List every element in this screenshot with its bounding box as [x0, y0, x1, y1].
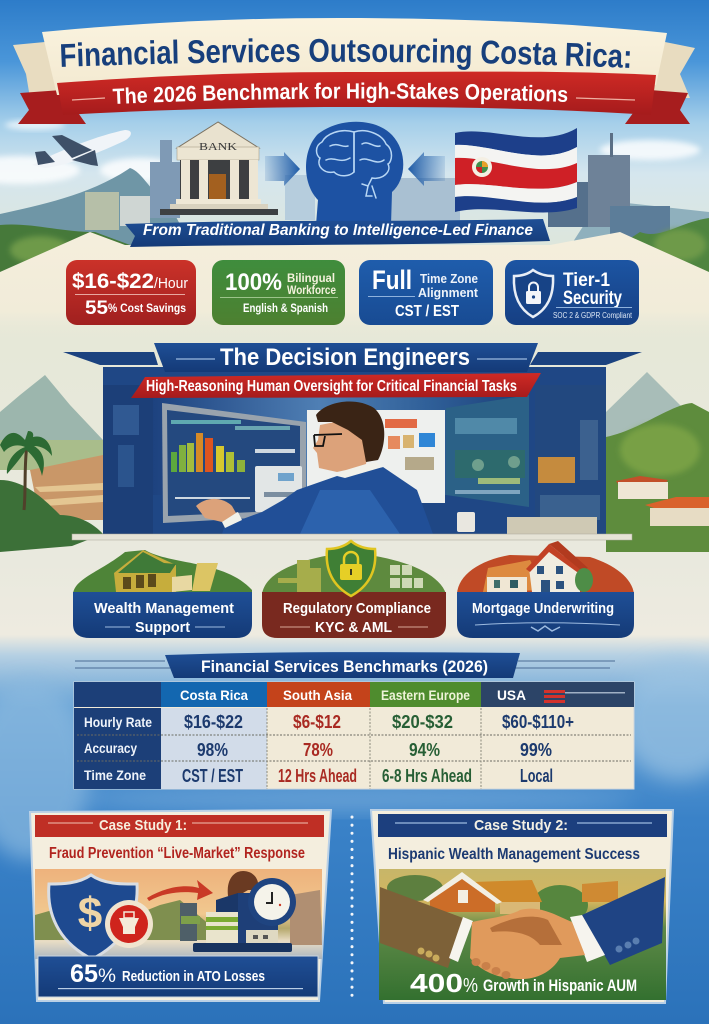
row: time zone: 6-8 Hrs Ahead	[382, 766, 472, 786]
card: wealth management support	[73, 550, 252, 638]
heading: the decision engineers	[63, 343, 642, 372]
card: mortgage underwriting: Mortgage Underwriting	[472, 600, 614, 617]
icon: Costa Rica flag	[455, 128, 577, 212]
icon: gold house and documents	[114, 550, 218, 592]
icon: shield with padlock	[514, 270, 553, 317]
arrow: bank to brain	[265, 152, 300, 186]
row label column: Time Zone	[84, 767, 146, 783]
banner: from traditional banking: From Traditional Banking to Intelligence-Led Finance	[143, 222, 533, 239]
card: cost: 55	[85, 298, 108, 319]
card: time zone alignment: Alignment	[418, 285, 479, 300]
result caption: 400% growth: Growth in Hispanic AUM	[483, 976, 637, 995]
card: regulatory compliance: Regulatory Compliance	[283, 600, 431, 617]
panel: case study 1: Fraud Prevention “Live-Market” Response	[49, 845, 305, 862]
card: tier-1 security: SOC 2 & GDPR Compliant	[553, 311, 633, 320]
right monitor with dashboard	[446, 395, 529, 507]
panel: case study 2: Case Study 2:	[474, 817, 568, 834]
result banner: 65% reduction: Reduction in ATO Losses	[122, 968, 265, 985]
icon: dollar shield	[49, 875, 153, 959]
arrow: flag to brain	[408, 152, 445, 186]
card: time zone alignment: Time Zone	[420, 271, 478, 286]
result banner: 65% reduction: %	[98, 966, 116, 987]
result caption: 400% growth: 400	[410, 968, 463, 998]
icon: USA flag	[544, 690, 625, 703]
panel: decision engineers scene	[103, 367, 606, 534]
panel: case study 1: Case Study 1:	[99, 817, 187, 834]
result banner: 65% reduction	[38, 956, 318, 997]
right sleeve	[582, 877, 665, 965]
row: accuracy	[197, 740, 552, 760]
heading: the decision engineers: The Decision Engineers	[220, 344, 470, 371]
card: cost: $16-$22	[72, 270, 154, 293]
header row: South Asia	[283, 687, 352, 703]
card: cost: % Cost Savings	[108, 301, 186, 315]
card: bilingual workforce: 100%	[225, 269, 282, 296]
card: cost: /Hour	[154, 275, 188, 292]
result caption: 400% growth: %	[463, 975, 478, 997]
heading: financial services benchmarks: Financial Services Benchmarks (2026)	[201, 657, 488, 676]
row: time zone	[182, 766, 553, 786]
panel: case study 2: Hispanic Wealth Management Success	[388, 846, 640, 863]
mug	[457, 512, 475, 532]
icon: dollar shield: $	[78, 889, 102, 938]
card: bilingual workforce	[212, 260, 345, 325]
header row: Costa Rica	[180, 687, 248, 703]
upper landscape with mountains, skyline and trees	[0, 133, 709, 300]
header row	[74, 682, 634, 707]
figure: analyst in blue suit	[196, 402, 433, 534]
row: hourly rate: $60-$110+	[502, 712, 574, 732]
heading: financial services benchmarks	[75, 652, 615, 678]
title banner: Financial Services Outsourcing Costa Rica:	[61, 38, 630, 70]
card: time zone alignment	[359, 260, 493, 325]
icon: bank building	[160, 122, 278, 215]
stage shelf	[72, 534, 632, 540]
card: time zone alignment: CST / EST	[395, 303, 459, 320]
panel: case study 1	[30, 810, 331, 1001]
card: bilingual workforce: English & Spanish	[243, 301, 328, 315]
title banner	[13, 18, 695, 124]
left sleeve	[380, 887, 463, 968]
table: benchmark comparison	[74, 682, 634, 789]
illustration: fraud prevention	[35, 869, 322, 959]
banner: from traditional banking	[125, 219, 550, 247]
row label column: Accuracy	[84, 740, 137, 756]
icon: brain in head	[306, 122, 403, 225]
result caption: 400% growth	[410, 968, 637, 998]
card: mortgage underwriting	[457, 541, 634, 638]
row: hourly rate: $6-$12	[293, 712, 341, 732]
row: hourly rate: $16-$22	[184, 712, 243, 732]
panel: cream key-metrics backdrop	[0, 232, 709, 345]
card: wealth management support: Support	[135, 619, 190, 636]
left monitor with bar chart	[162, 403, 306, 523]
row: time zone: Local	[520, 766, 553, 786]
result banner: 65% reduction: 65	[70, 960, 98, 988]
row: time zone: 12 Hrs Ahead	[278, 766, 357, 786]
row: accuracy: 94%	[409, 740, 440, 760]
header row: USA	[497, 687, 526, 703]
illustration: handshake with house	[379, 869, 666, 1000]
card: regulatory compliance	[262, 541, 446, 638]
row: time zone: CST / EST	[182, 766, 243, 786]
left landscape with mountain, palm and terraces	[0, 375, 103, 552]
row: accuracy: 78%	[303, 740, 333, 760]
row: accuracy: 98%	[197, 740, 228, 760]
icon: houses	[483, 541, 593, 592]
card: tier-1 security: Tier-1	[563, 270, 610, 291]
clasped hands	[470, 909, 585, 979]
card: regulatory compliance: KYC & AML	[315, 619, 392, 636]
icon: person and clock	[193, 871, 296, 952]
card: cost	[66, 260, 196, 325]
divider: dotted line	[350, 817, 354, 998]
icon: bank building: BANK	[199, 141, 237, 153]
ribbon: high-reasoning human oversight	[131, 373, 541, 398]
card: bilingual workforce: Workforce	[287, 283, 336, 297]
icon: arrow	[147, 880, 213, 901]
row: accuracy: 99%	[520, 740, 552, 760]
title banner: The 2026 Benchmark for High-Stakes Operations	[112, 82, 568, 104]
panel: case study 2	[371, 810, 673, 1003]
row: hourly rate: $20-$32	[392, 712, 453, 732]
card: wealth management support: Wealth Management	[94, 600, 234, 617]
icon: compliance shield	[327, 541, 375, 596]
right landscape with hill and houses	[606, 372, 709, 552]
card: tier-1 security	[505, 260, 639, 325]
row: hourly rate	[184, 712, 574, 732]
ribbon: high-reasoning human oversight: High-Reasoning Human Oversight for Critical Financial Tasks	[146, 378, 517, 395]
card: bilingual workforce: Bilingual	[287, 271, 335, 285]
row label column	[74, 708, 161, 789]
row label column: Hourly Rate	[84, 714, 152, 730]
icon: airplane	[32, 130, 131, 168]
card: time zone alignment: Full	[372, 265, 412, 295]
card: tier-1 security: Security	[563, 288, 622, 309]
header row: Eastern Europe	[381, 687, 470, 703]
white monitor with charts	[307, 410, 445, 503]
